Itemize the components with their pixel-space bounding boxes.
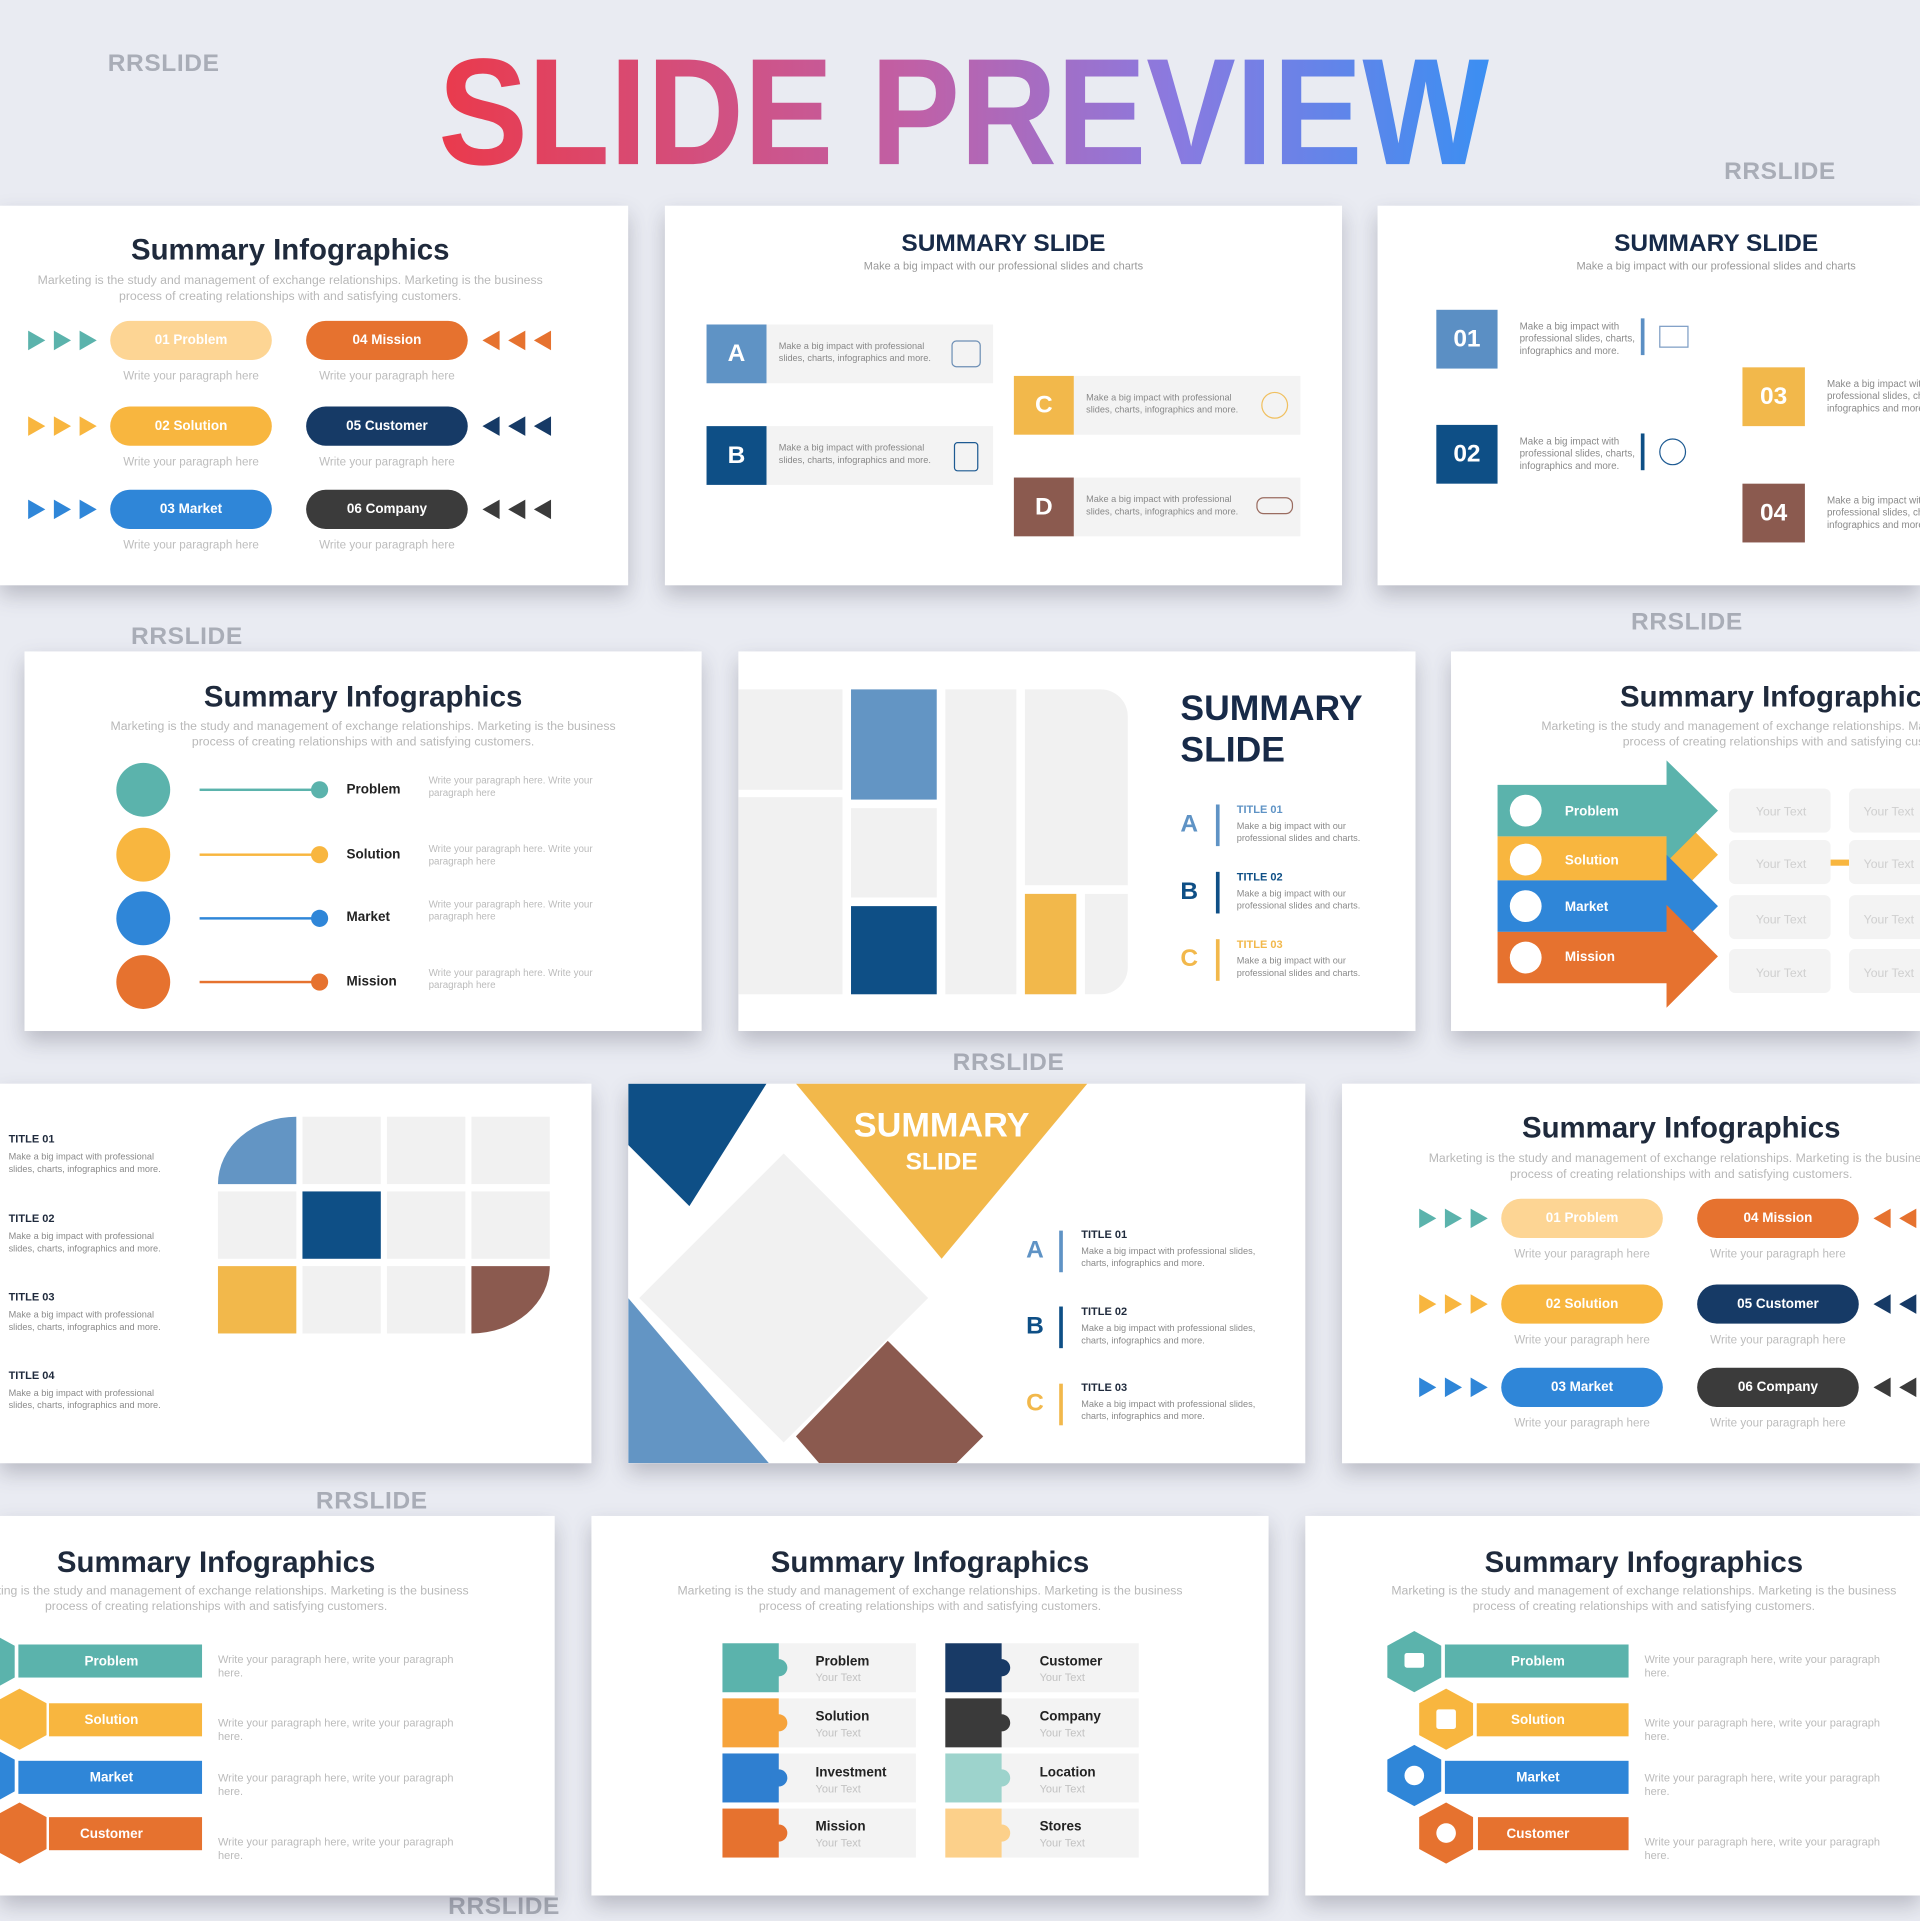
subtitle: process of creating relationships with and satisfying customers. [45, 1600, 387, 1614]
tiles: Mission [816, 1819, 866, 1834]
pill grid: 06 Company [1738, 1380, 1818, 1395]
items: slides, charts, infographics and more. [1086, 404, 1238, 415]
pill grid: 02 Solution [155, 419, 227, 433]
panel: slide 3 numbered [1378, 206, 1920, 585]
diamond shapes: SLIDE [906, 1148, 978, 1175]
hex bars: Write your paragraph here, write your paragraph [218, 1773, 453, 1785]
title list [8, 1133, 161, 1411]
items: slides, charts, infographics and more. [1086, 506, 1238, 517]
subtitle [111, 720, 616, 749]
hex bars: Problem [85, 1653, 138, 1668]
panel: slide 1 pills [0, 206, 628, 585]
list: C [1180, 945, 1198, 972]
pill grid: Write your paragraph here [319, 456, 455, 469]
pill grid: 05 Customer [346, 419, 428, 433]
subtitle [38, 274, 543, 304]
watermark: RRSLIDE [448, 1893, 560, 1920]
subtitle [677, 1584, 1183, 1614]
tiles: Your Text [1040, 1838, 1085, 1850]
title list: Make a big impact with professional slides, charts, infographics and more. [9, 1151, 161, 1174]
arrow chart: Your Text [1756, 966, 1807, 980]
arrow chart: Your Text [1756, 857, 1807, 871]
heading: SUMMARY SLIDE [901, 230, 1106, 257]
list: B [1180, 878, 1198, 905]
panel: slide 10 hex bars [0, 1516, 555, 1896]
list: TITLE 01 [1081, 1228, 1127, 1240]
arrow chart [1498, 760, 1920, 1008]
arrow chart: Your Text [1756, 805, 1807, 819]
hex bars: Customer [1507, 1826, 1570, 1841]
items: Make a big impact with professional [779, 340, 924, 351]
title list: Make a big impact with professional slides, charts, infographics and more. [9, 1387, 161, 1411]
heading: Summary Infographics [57, 1547, 375, 1580]
arrow chart: Your Text [1864, 912, 1915, 926]
subtitle [1391, 1584, 1896, 1614]
pill grid: 05 Customer [1737, 1297, 1819, 1311]
panel: slide 7 grid [0, 1084, 591, 1463]
list: B [1026, 1313, 1044, 1340]
panel: slide 8 diamonds [628, 1084, 1305, 1463]
pill grid: 02 Solution [1546, 1297, 1618, 1311]
items: 03 [1760, 383, 1787, 410]
pill grid: 04 Mission [353, 333, 421, 348]
subtitle [1429, 1152, 1920, 1182]
subtitle: Marketing is the study and management of exchange relationships. Marketing is the business [38, 274, 543, 288]
items: 04 [1760, 500, 1787, 527]
pill grid: Write your paragraph here [123, 539, 259, 552]
hex bars [1387, 1631, 1880, 1864]
hex bars: Market [90, 1770, 134, 1785]
tiles: Your Text [1040, 1784, 1085, 1796]
rows: Mission [347, 975, 397, 989]
watermark: RRSLIDE [316, 1488, 428, 1515]
subtitle: Make a big impact with our professional slides and charts [864, 260, 1143, 272]
title list: TITLE 04 [9, 1369, 55, 1381]
items: Make a big impact with professional slides, charts, infographics and more. [1520, 321, 1635, 356]
panel: slide 9 pills [1342, 1084, 1920, 1463]
list: TITLE 02 [1237, 871, 1283, 883]
heading: SLIDE [1180, 731, 1285, 770]
hex bars: here. [218, 1667, 243, 1679]
rows: Write your paragraph here. Write your paragraph here [429, 844, 593, 867]
watermark: RRSLIDE [108, 50, 220, 77]
grid [218, 1116, 550, 1334]
items: 02 [1453, 441, 1481, 468]
tiles: Stores [1040, 1819, 1081, 1834]
tiles: Company [1040, 1708, 1101, 1723]
hex bars: Solution [1511, 1712, 1565, 1727]
tiles: Investment [816, 1765, 887, 1780]
list: Make a big impact with our professional slides and charts. [1237, 888, 1360, 911]
title list: Make a big impact with professional slides, charts, infographics and more. [9, 1309, 161, 1332]
items: slides, charts, infographics and more. [779, 454, 931, 465]
arrow chart: Problem [1565, 804, 1619, 819]
pill grid [28, 320, 552, 552]
tiles: Customer [1040, 1653, 1103, 1668]
pill grid [1419, 1198, 1916, 1430]
subtitle [1541, 720, 1920, 749]
hex bars: Problem [1511, 1653, 1565, 1668]
subtitle: Marketing is the study and management of exchange relationships. Marketing is the business [111, 720, 616, 733]
panel: slide 2 ABCD [665, 206, 1342, 585]
arrow chart: Market [1565, 899, 1609, 914]
tiles: Location [1040, 1765, 1096, 1780]
items: Make a big impact with professional [1086, 392, 1232, 403]
list: Make a big impact with professional slides, charts, infographics and more. [1081, 1398, 1255, 1422]
pill grid: 06 Company [347, 502, 427, 517]
items: B [728, 442, 745, 469]
list [1026, 1228, 1255, 1426]
hex bars: here. [1644, 1731, 1670, 1743]
pill grid: Write your paragraph here [1710, 1248, 1846, 1261]
subtitle: Marketing is the study and management of exchange relationships. Marketing is the business [1391, 1584, 1896, 1598]
items: 01 [1453, 326, 1481, 353]
pill grid: 03 Market [1551, 1380, 1613, 1395]
tiles: Problem [816, 1653, 869, 1668]
rows [116, 762, 593, 1009]
pill grid: Write your paragraph here [123, 370, 259, 383]
heading: SUMMARY [1180, 689, 1363, 729]
list: C [1026, 1390, 1044, 1417]
heading: Summary Infographics [1522, 1112, 1840, 1145]
tiles: Your Text [816, 1672, 861, 1684]
pill grid: 04 Mission [1744, 1211, 1812, 1226]
heading: Summary Infographics [771, 1547, 1089, 1580]
pill grid: Write your paragraph here [1514, 1333, 1650, 1347]
subtitle: process of creating relationships with and satisfying customers. [1510, 1168, 1852, 1182]
rows: Market [347, 910, 390, 924]
list: Make a big impact with our professional slides and charts. [1237, 820, 1360, 844]
subtitle: process of creating relationships with and satisfying customers. [192, 736, 534, 749]
panel: slide 6 arrows [1451, 651, 1920, 1031]
pill grid: 03 Market [160, 502, 222, 517]
heading [1180, 689, 1363, 770]
hex bars: Write your paragraph here, write your paragraph [218, 1836, 453, 1848]
list: TITLE 02 [1081, 1305, 1127, 1318]
tiles: Your Text [1040, 1727, 1085, 1739]
hex bars: here. [218, 1850, 243, 1862]
list: TITLE 03 [1237, 938, 1283, 950]
watermark: RRSLIDE [131, 623, 243, 650]
rows: Problem [347, 782, 400, 797]
title list: TITLE 01 [9, 1133, 55, 1145]
heading: Summary Infographics [1485, 1547, 1803, 1580]
hex bars: here. [1644, 1786, 1670, 1798]
diamond shapes: SUMMARY [854, 1106, 1030, 1144]
pill grid: 01 Problem [1546, 1211, 1618, 1226]
items [1436, 310, 1920, 542]
hex bars: Customer [80, 1826, 144, 1841]
list: Make a big impact with professional slides, charts, infographics and more. [1081, 1245, 1255, 1269]
title list: Make a big impact with professional slides, charts, infographics and more. [9, 1231, 161, 1254]
list: A [1026, 1237, 1044, 1264]
tiles: Solution [816, 1708, 869, 1723]
pill grid: Write your paragraph here [1710, 1333, 1846, 1347]
list: Make a big impact with professional slides, charts, infographics and more. [1081, 1322, 1255, 1346]
hex bars: Write your paragraph here, write your paragraph [218, 1718, 453, 1730]
hex bars: here. [1644, 1850, 1670, 1862]
arrow chart: Your Text [1756, 912, 1807, 926]
panel: slide 5 blocks [738, 651, 1416, 1031]
pill grid: Write your paragraph here [1514, 1417, 1650, 1430]
list: TITLE 01 [1237, 803, 1283, 816]
arrow chart: Solution [1565, 852, 1619, 867]
pill grid: Write your paragraph here [319, 370, 455, 383]
hex bars: Write your paragraph here, write your paragraph [218, 1654, 453, 1666]
watermark: RRSLIDE [1631, 609, 1743, 636]
hex bars: Write your paragraph here, write your paragraph [1644, 1718, 1880, 1730]
items [706, 324, 1300, 536]
hex bars: Write your paragraph here, write your paragraph [1644, 1654, 1880, 1666]
items: C [1035, 392, 1053, 419]
heading: Summary Infographics [131, 234, 449, 267]
rows: Solution [347, 847, 400, 862]
tiles [722, 1643, 1138, 1858]
subtitle: Marketing is the study and management of exchange relationships. Marketing is the business [677, 1584, 1183, 1598]
hex bars: Write your paragraph here, write your paragraph [1644, 1836, 1880, 1848]
pill grid: Write your paragraph here [319, 539, 455, 552]
heading: Summary Infographics [204, 681, 522, 714]
rows: Write your paragraph here. Write your paragraph here [429, 775, 593, 798]
hex bars: here. [218, 1731, 243, 1743]
pill grid: Write your paragraph here [1710, 1417, 1846, 1430]
hex bars: Solution [85, 1712, 138, 1727]
panel: slide 11 puzzle tiles [591, 1516, 1269, 1896]
panel: slide 4 circles [24, 651, 702, 1031]
hex bars [0, 1638, 453, 1864]
tiles: Your Text [816, 1784, 861, 1796]
pill grid: 01 Problem [155, 333, 227, 348]
hex bars: here. [1644, 1667, 1670, 1679]
list: A [1180, 811, 1198, 838]
list [1180, 803, 1360, 981]
pill grid: Write your paragraph here [123, 456, 259, 469]
panel: slide 12 hex bars [1305, 1516, 1920, 1896]
items: Make a big impact with professional [1086, 493, 1232, 504]
hex bars: here. [218, 1786, 243, 1798]
hex bars: Market [1516, 1770, 1560, 1785]
tiles: Your Text [1040, 1672, 1085, 1684]
pill grid: Write your paragraph here [1514, 1248, 1650, 1261]
hex bars: Write your paragraph here, write your paragraph [1644, 1773, 1880, 1785]
subtitle: process of creating relationships with and satisfying customers. [1473, 1600, 1815, 1614]
block mosaic [738, 689, 1128, 994]
list: Make a big impact with our professional slides and charts. [1237, 955, 1360, 978]
subtitle: Make a big impact with our professional slides and charts [1576, 260, 1856, 272]
rows: Write your paragraph here. Write your paragraph here [429, 899, 593, 922]
items: A [728, 340, 745, 367]
arrow chart: Mission [1565, 949, 1615, 964]
diamond shapes [628, 1084, 1088, 1464]
rows: Write your paragraph here. Write your paragraph here [429, 967, 593, 991]
subtitle: process of creating relationships with and satisfying customers. [759, 1600, 1101, 1614]
subtitle: process of creating relationships with and satisfying customers. [119, 290, 461, 304]
items: Make a big impact with professional slides, charts, infographics and more. [1520, 436, 1635, 471]
arrow chart: Your Text [1864, 966, 1915, 980]
items: Make a big impact with professional [779, 442, 924, 453]
list: TITLE 03 [1081, 1381, 1127, 1393]
arrow chart: Your Text [1864, 857, 1915, 871]
watermark: RRSLIDE [953, 1049, 1064, 1076]
items: slides, charts, infographics and more. [779, 353, 931, 364]
arrow chart: Your Text [1864, 805, 1915, 819]
tiles: Your Text [816, 1727, 861, 1739]
subtitle: Marketing is the study and management of exchange relationships. Marketing is the business [1429, 1152, 1920, 1166]
title list: TITLE 02 [9, 1212, 55, 1224]
watermark: RRSLIDE [1724, 158, 1836, 185]
title list: TITLE 03 [9, 1291, 55, 1303]
tiles: Your Text [816, 1838, 861, 1850]
items: D [1035, 493, 1053, 520]
subtitle [0, 1584, 469, 1614]
heading: SUMMARY SLIDE [1614, 230, 1818, 257]
